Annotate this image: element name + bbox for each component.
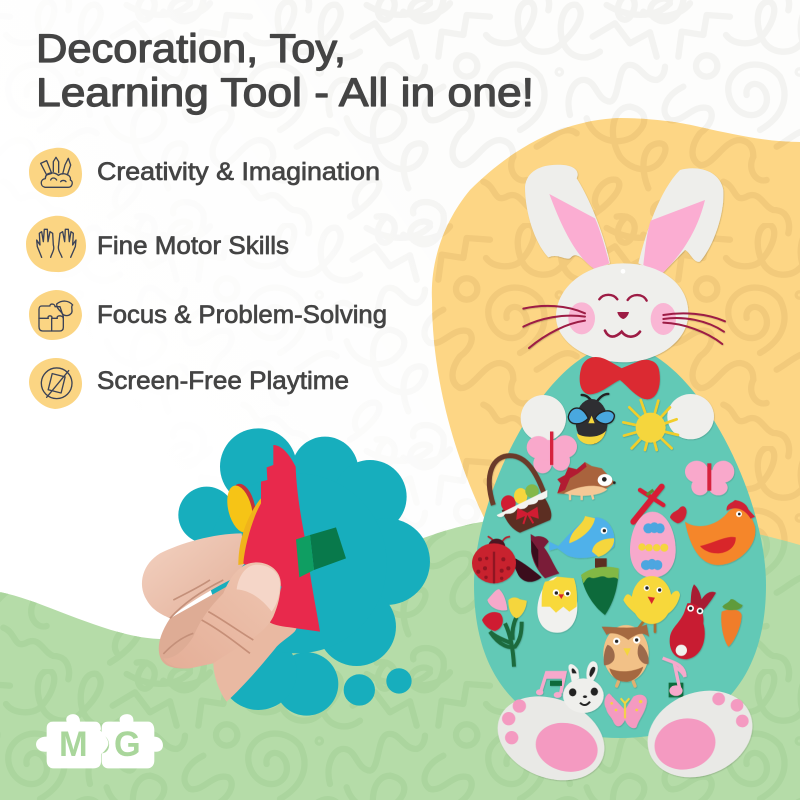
velcro tab: [296, 527, 346, 577]
orange carrot: [721, 599, 743, 647]
bee: [568, 394, 614, 444]
thought cloud with hand holding felt carrot: [142, 428, 430, 716]
yellow blob background: [432, 118, 800, 545]
owl: [602, 624, 649, 686]
benefit: screen-free playtime: [29, 358, 349, 409]
head: [556, 263, 688, 362]
felt bunny: egg body: [474, 345, 766, 738]
green wave background: [0, 500, 800, 800]
palm: [213, 622, 297, 702]
chicken: [670, 500, 755, 565]
title: [36, 27, 534, 115]
fingers behind thumb: [159, 587, 227, 669]
sun: [623, 400, 678, 450]
benefit list: [26, 148, 387, 409]
title: Decoration, Toy,: [36, 27, 346, 71]
left foot: [485, 681, 617, 795]
decorated easter egg: [630, 512, 676, 578]
benefit: fine motor skills: Fine Motor Skills: [97, 232, 289, 260]
red felt carrot: [243, 445, 320, 632]
logo: M G puzzle pieces: M: [59, 725, 88, 764]
music note, right: [663, 658, 685, 697]
finger creases: [163, 580, 223, 654]
butterfly, right: [685, 461, 734, 495]
hedgehog: [557, 462, 616, 500]
index finger: [142, 533, 245, 618]
bow tie: [580, 357, 660, 399]
right ear: [638, 168, 723, 274]
ladybug: [472, 537, 516, 583]
benefit: focus and problem-solving: [29, 290, 387, 340]
left ear: [525, 165, 610, 269]
benefit: screen-free playtime: Screen-Free Playtime: [97, 367, 349, 395]
benefit: focus and problem-solving: Focus & Problem-Solving: [97, 301, 387, 329]
green felt carrot top: [581, 558, 619, 615]
music note, left: [536, 673, 565, 698]
chick hatching from egg: [537, 577, 577, 633]
red felt cross: [633, 487, 663, 522]
blue bird: [549, 516, 615, 558]
mini white bunny: [563, 661, 604, 713]
small pink butterfly: [604, 693, 647, 728]
yellow chick: [623, 576, 680, 632]
white paws: [521, 394, 714, 442]
thumb: [163, 562, 281, 668]
benefit: creativity and imagination: [29, 148, 380, 197]
right foot: [634, 675, 766, 793]
benefit: creativity and imagination: Creativity & Imagination: [97, 158, 380, 186]
logo: M G puzzle pieces: G: [114, 725, 141, 764]
thumbnail: [237, 565, 280, 612]
benefit: fine motor skills: [26, 216, 289, 272]
title: Learning Tool - All in one!: [36, 71, 534, 115]
felt bunny: toys and feet: [472, 432, 766, 795]
squirrel: [513, 534, 559, 582]
basket: [489, 456, 551, 533]
butterfly, top left: [527, 432, 577, 473]
face and whiskers: [523, 295, 725, 348]
red bunny: [670, 584, 716, 659]
teal felt cloud: [178, 428, 430, 716]
yellow felt leaf: [223, 481, 263, 565]
logo: M G puzzle pieces: [36, 714, 163, 768]
felt bunny: head, ears and bow: [521, 165, 725, 450]
cheeks: [568, 302, 676, 335]
tulips: [482, 589, 527, 667]
